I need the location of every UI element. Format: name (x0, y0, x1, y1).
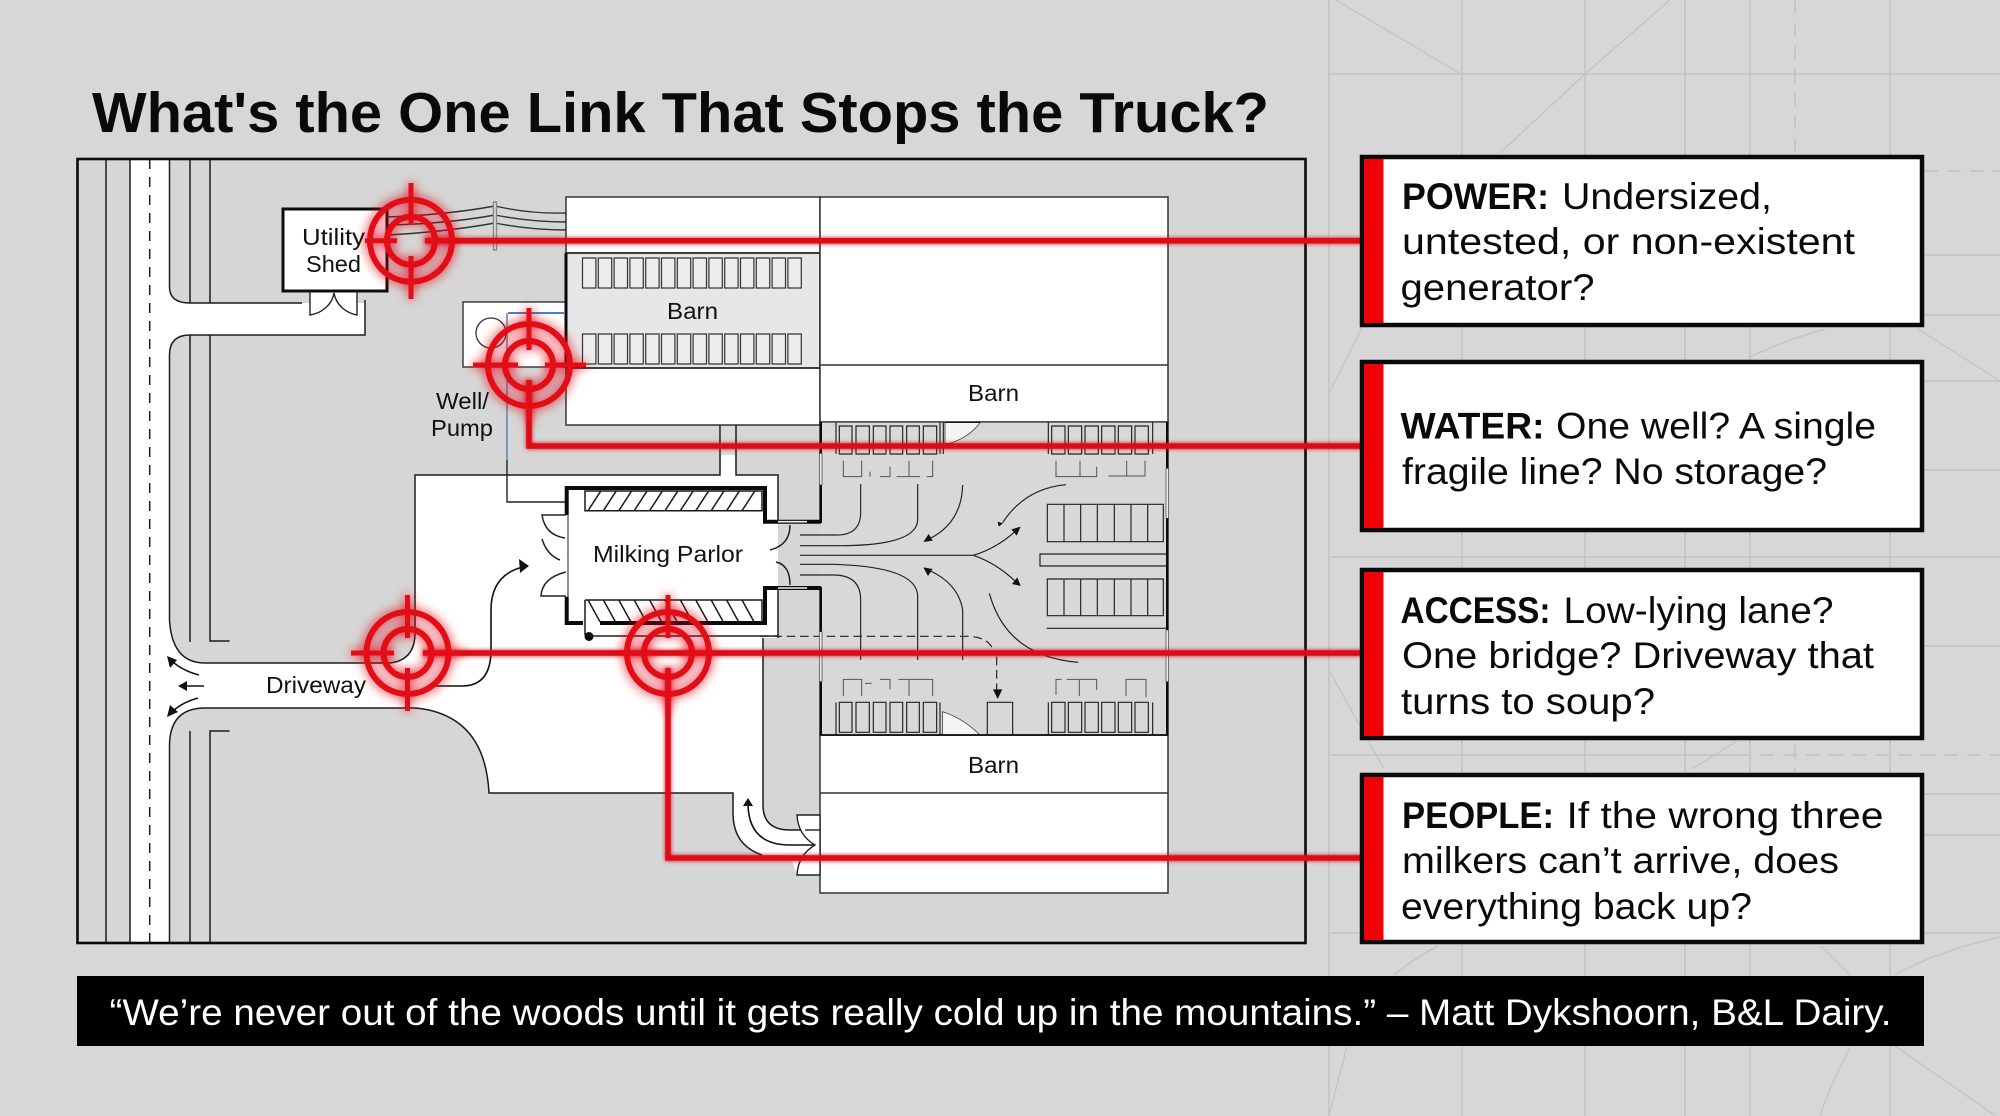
well and pump (431, 302, 567, 502)
connector lines (423, 241, 1362, 858)
driveway direction arrows (167, 559, 816, 845)
power lines (387, 202, 566, 250)
utility shed: Shed (306, 251, 361, 277)
card: access: ACCESS: (1400, 590, 1550, 631)
card: power: generator? (1400, 267, 1594, 308)
card: water: WATER: (1400, 406, 1544, 446)
stall rows (836, 423, 1153, 735)
freestall holding area (760, 422, 1169, 735)
card: water: One well? A single (1556, 406, 1876, 446)
card: people: everything back up? (1401, 886, 1752, 927)
card: power (1362, 157, 1922, 325)
card: power: Undersized, (1562, 176, 1772, 217)
panel: farm site plan (78, 159, 1306, 943)
quote bar (77, 976, 1924, 1046)
target: access driveway (351, 595, 463, 711)
lower barn side door (797, 815, 820, 875)
card: access: One bridge? Driveway that (1402, 635, 1875, 676)
well and pump: Well/ (436, 388, 490, 414)
driveway label: Driveway (266, 672, 367, 698)
card: people (1362, 775, 1922, 942)
utility shed (283, 209, 387, 315)
target: power (365, 183, 455, 299)
card: access: turns to soup? (1401, 681, 1655, 722)
card: people: If the wrong three (1566, 795, 1884, 836)
barn block: lower (820, 735, 1168, 893)
feed bunk brackets (843, 461, 1146, 697)
card: water: fragile line? No storage? (1402, 451, 1827, 492)
quote bar: “We’re never out of the woods until it gets really cold up in the mountains.” – Matt Dykshoorn, B&L Dairy. (110, 992, 1892, 1033)
door openings (943, 423, 980, 735)
road and driveway surfaces (130, 159, 820, 942)
well and pump: Pump (431, 415, 493, 441)
milking parlor: Milking Parlor (593, 541, 743, 567)
barn block: lower: Barn (968, 752, 1019, 778)
road and driveway outlines (106, 159, 820, 942)
milking parlor (541, 488, 821, 641)
target: people parlor (625, 595, 712, 711)
cow flow lines (760, 484, 1078, 699)
barn block: upper left: Barn (667, 298, 718, 324)
card: people: milkers can’t arrive, does (1402, 840, 1839, 881)
card: power: POWER: (1402, 176, 1549, 217)
card: people: PEOPLE: (1402, 795, 1554, 836)
card: access: Low-lying lane? (1564, 590, 1834, 631)
title: What's the One Link That Stops the Truck? (92, 81, 1269, 145)
target: water (473, 308, 586, 423)
barn block: upper left (566, 197, 820, 425)
barn block: upper right: Barn (968, 380, 1019, 406)
utility shed: Utility (302, 224, 366, 250)
hatched walkways (585, 491, 762, 635)
right side stalls (1040, 504, 1166, 628)
parlor doors (541, 515, 790, 596)
card: access (1362, 570, 1922, 738)
card: water (1362, 362, 1922, 530)
card: power: untested, or non-existent (1402, 221, 1856, 262)
barn walls (765, 422, 1169, 735)
barn block: upper right (820, 197, 1168, 422)
